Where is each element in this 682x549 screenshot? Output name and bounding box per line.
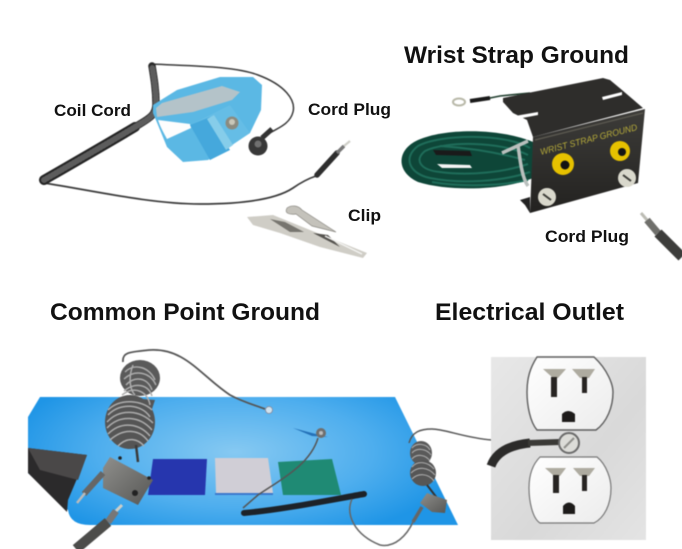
illustration: wrist strap ground bracket bbox=[402, 78, 645, 213]
lower receptacle bbox=[529, 457, 611, 523]
grounding cord and ring bbox=[491, 443, 530, 466]
center screw bbox=[559, 433, 579, 453]
wall plate bbox=[491, 357, 646, 540]
thin cord from coil to snap bbox=[152, 64, 293, 134]
black corner fold bbox=[28, 448, 87, 512]
green coiled wire bbox=[402, 131, 533, 188]
label: Cord Plug (wrist strap): Cord Plug bbox=[308, 100, 391, 119]
label: Coil Cord: Coil Cord bbox=[54, 101, 131, 120]
illustration: common point ground mat bbox=[28, 350, 492, 549]
cord to outlet bbox=[409, 429, 492, 443]
coiled cord bundle left bbox=[105, 360, 160, 449]
grey swatch bbox=[215, 458, 273, 493]
bracket lettering: WRIST STRAP GROUND bbox=[539, 122, 639, 157]
mounting screw right bbox=[618, 169, 636, 187]
bracket top plate bbox=[503, 78, 643, 137]
illustration: wrist strap with coil cord bbox=[44, 64, 350, 204]
mounting screw left bbox=[538, 188, 556, 206]
strap buckle bbox=[190, 105, 250, 160]
band opening bbox=[158, 120, 191, 139]
heading: Wrist Strap Ground: Wrist Strap Ground bbox=[404, 42, 629, 69]
green swatch bbox=[278, 459, 341, 495]
ring terminal and lead bbox=[480, 93, 530, 100]
bracket front plate bbox=[530, 109, 645, 213]
right junction block bbox=[420, 493, 447, 513]
coil on mat bbox=[244, 494, 364, 513]
label: Cord Plug (ground): Cord Plug bbox=[545, 227, 629, 246]
cord from coil to right block bbox=[350, 499, 413, 545]
illustration: cord plug at right edge bbox=[641, 213, 682, 257]
thin cord to plug bbox=[44, 176, 316, 204]
blue mat bbox=[28, 397, 458, 525]
wrist band bbox=[153, 77, 262, 162]
mat snap cord bbox=[243, 438, 318, 508]
upper receptacle bbox=[527, 357, 613, 430]
illustration: electrical outlet bbox=[491, 357, 646, 540]
strap stud bbox=[226, 116, 238, 130]
illustration: alligator clip bbox=[247, 206, 367, 258]
cord snap bbox=[262, 129, 272, 138]
mat snap tab bbox=[293, 428, 328, 437]
band grey lining bbox=[156, 86, 240, 117]
label: Clip: Clip bbox=[348, 206, 381, 225]
wire tie bbox=[502, 141, 528, 186]
yellow jack right bbox=[610, 141, 630, 161]
common point junction block bbox=[103, 457, 153, 505]
jack plug bbox=[317, 153, 337, 175]
yellow jack left bbox=[552, 153, 574, 175]
heading: Common Point Ground: Common Point Ground bbox=[50, 299, 320, 326]
coil cord bbox=[44, 66, 156, 180]
cord plug in front bbox=[116, 505, 122, 511]
cord to mat ring bbox=[123, 350, 265, 409]
small coiled bundle right bbox=[410, 441, 437, 498]
heading: Electrical Outlet: Electrical Outlet bbox=[435, 299, 624, 326]
blue swatch bbox=[148, 459, 207, 495]
